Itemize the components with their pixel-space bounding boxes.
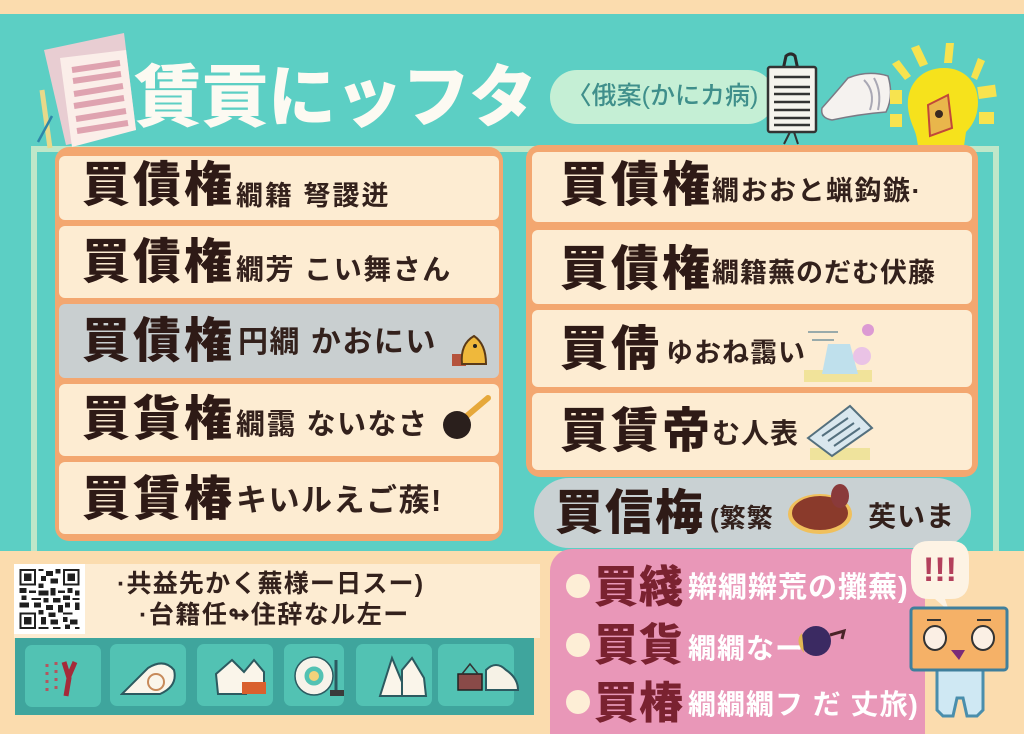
row text r1 <box>560 159 922 212</box>
character mascot <box>910 606 1008 718</box>
row text 3 <box>82 315 437 368</box>
row text 1: 買債権 <box>82 159 235 212</box>
note line 1: ·共益先かく蕪様ー日スー) <box>117 570 424 598</box>
row text r1: 買債権 <box>560 159 713 212</box>
icon: white cloth <box>821 72 892 121</box>
speech bubble: !!! <box>923 551 957 589</box>
row 3 <box>532 310 972 387</box>
icon: light bulb <box>890 43 997 145</box>
heading 3: 買椿 <box>594 679 684 728</box>
heading 1: 買綫 <box>594 563 684 612</box>
row text 4 <box>82 393 429 446</box>
pill text left: (繁繁 <box>710 503 774 533</box>
tile 4 <box>284 644 344 706</box>
row text r2: 繝籍蕪のだむ伏藤 <box>712 258 936 288</box>
icon: stacked papers <box>37 33 136 148</box>
row text 2 <box>82 236 452 289</box>
qr code <box>14 564 85 634</box>
row 1 <box>59 156 499 220</box>
row 2 <box>532 230 972 304</box>
text 1: 辮繝辮荒の攤蕪) <box>688 572 909 604</box>
row text 1: 繝籍 弩謖迸 <box>236 181 391 211</box>
icon: houses <box>215 658 266 695</box>
panel background <box>526 145 978 477</box>
row 1 <box>532 152 972 222</box>
icon: documents <box>806 404 874 460</box>
tile 1 <box>25 645 101 707</box>
subtitle pill <box>550 70 775 124</box>
row text 1 <box>82 159 391 212</box>
row 4 <box>59 384 499 456</box>
row text 5 <box>82 473 443 526</box>
row text r3: 買倩 <box>560 323 662 376</box>
pale green frame <box>31 146 999 551</box>
row 4 <box>532 393 972 470</box>
row text 5: 買賃椿 <box>82 473 235 526</box>
text 3: 繝繝繝フ だ 丈旅) <box>688 689 919 720</box>
icon: basket and building <box>457 662 519 691</box>
row 5 <box>59 462 499 534</box>
pill text right: 苵いま <box>868 501 955 532</box>
icon: chick <box>452 334 487 366</box>
row text r4: む人表 <box>712 418 799 449</box>
row text 4: 繝靄 ないなさ <box>236 409 429 441</box>
row text 2: 繝芳 こい舞さん <box>236 254 452 285</box>
row text r3 <box>560 323 806 376</box>
row text r3: ゆおね靄い <box>666 338 806 368</box>
row text r4: 買賃帝 <box>560 405 713 458</box>
row text 5: キいルえご蔟! <box>236 483 443 518</box>
row 2 <box>59 226 499 298</box>
bullet 2 <box>566 633 590 657</box>
text 2: 繝繝なー <box>688 633 804 664</box>
pill heading: 買信梅 <box>555 487 705 540</box>
icon strip <box>15 638 534 715</box>
icon: wreath <box>294 656 344 696</box>
speech bubble <box>911 541 969 606</box>
icon: small bird <box>798 626 846 656</box>
row text 3: 円繝 かおにい <box>238 326 437 359</box>
icon: brown animal <box>788 484 852 534</box>
teal main background <box>0 14 1024 551</box>
tile 3 <box>197 644 273 706</box>
subtitle pill: 〈俄案(かにカ病) <box>567 82 758 110</box>
panel: pink callout <box>550 549 925 734</box>
icon: wave <box>120 662 176 695</box>
row text 4: 買貨権 <box>82 393 235 446</box>
icon: mountains <box>378 655 428 697</box>
title: 賃貢にッフタ <box>134 60 536 136</box>
row 3 highlighted <box>59 304 499 378</box>
heading 2: 買貨 <box>594 621 684 670</box>
grey pill callout <box>534 478 971 548</box>
row text r2: 買債権 <box>560 243 713 296</box>
legs <box>937 670 983 716</box>
bullet 3 <box>566 690 590 714</box>
bullet 1 <box>566 574 590 598</box>
footer info: QR and notes <box>14 564 540 638</box>
panel: right list <box>526 145 978 477</box>
tile 5 <box>356 644 432 706</box>
row text r2 <box>560 243 936 296</box>
row text r4 <box>560 405 799 458</box>
tile 2 <box>110 644 186 706</box>
row text r1: 繝おおと蝋鈎鏃· <box>712 176 922 206</box>
tile 6 <box>438 644 514 706</box>
icon: tree <box>46 661 78 696</box>
icon: flowers <box>804 324 874 382</box>
icon: clipboard <box>766 52 818 144</box>
icon: frying pan <box>443 395 491 439</box>
panel background <box>55 147 503 541</box>
panel: left list <box>55 147 503 541</box>
row text 3: 買債権 <box>82 315 235 368</box>
note line 2: ·台籍任↬住辞なル左ー <box>139 601 410 629</box>
row text 2: 買債権 <box>82 236 235 289</box>
